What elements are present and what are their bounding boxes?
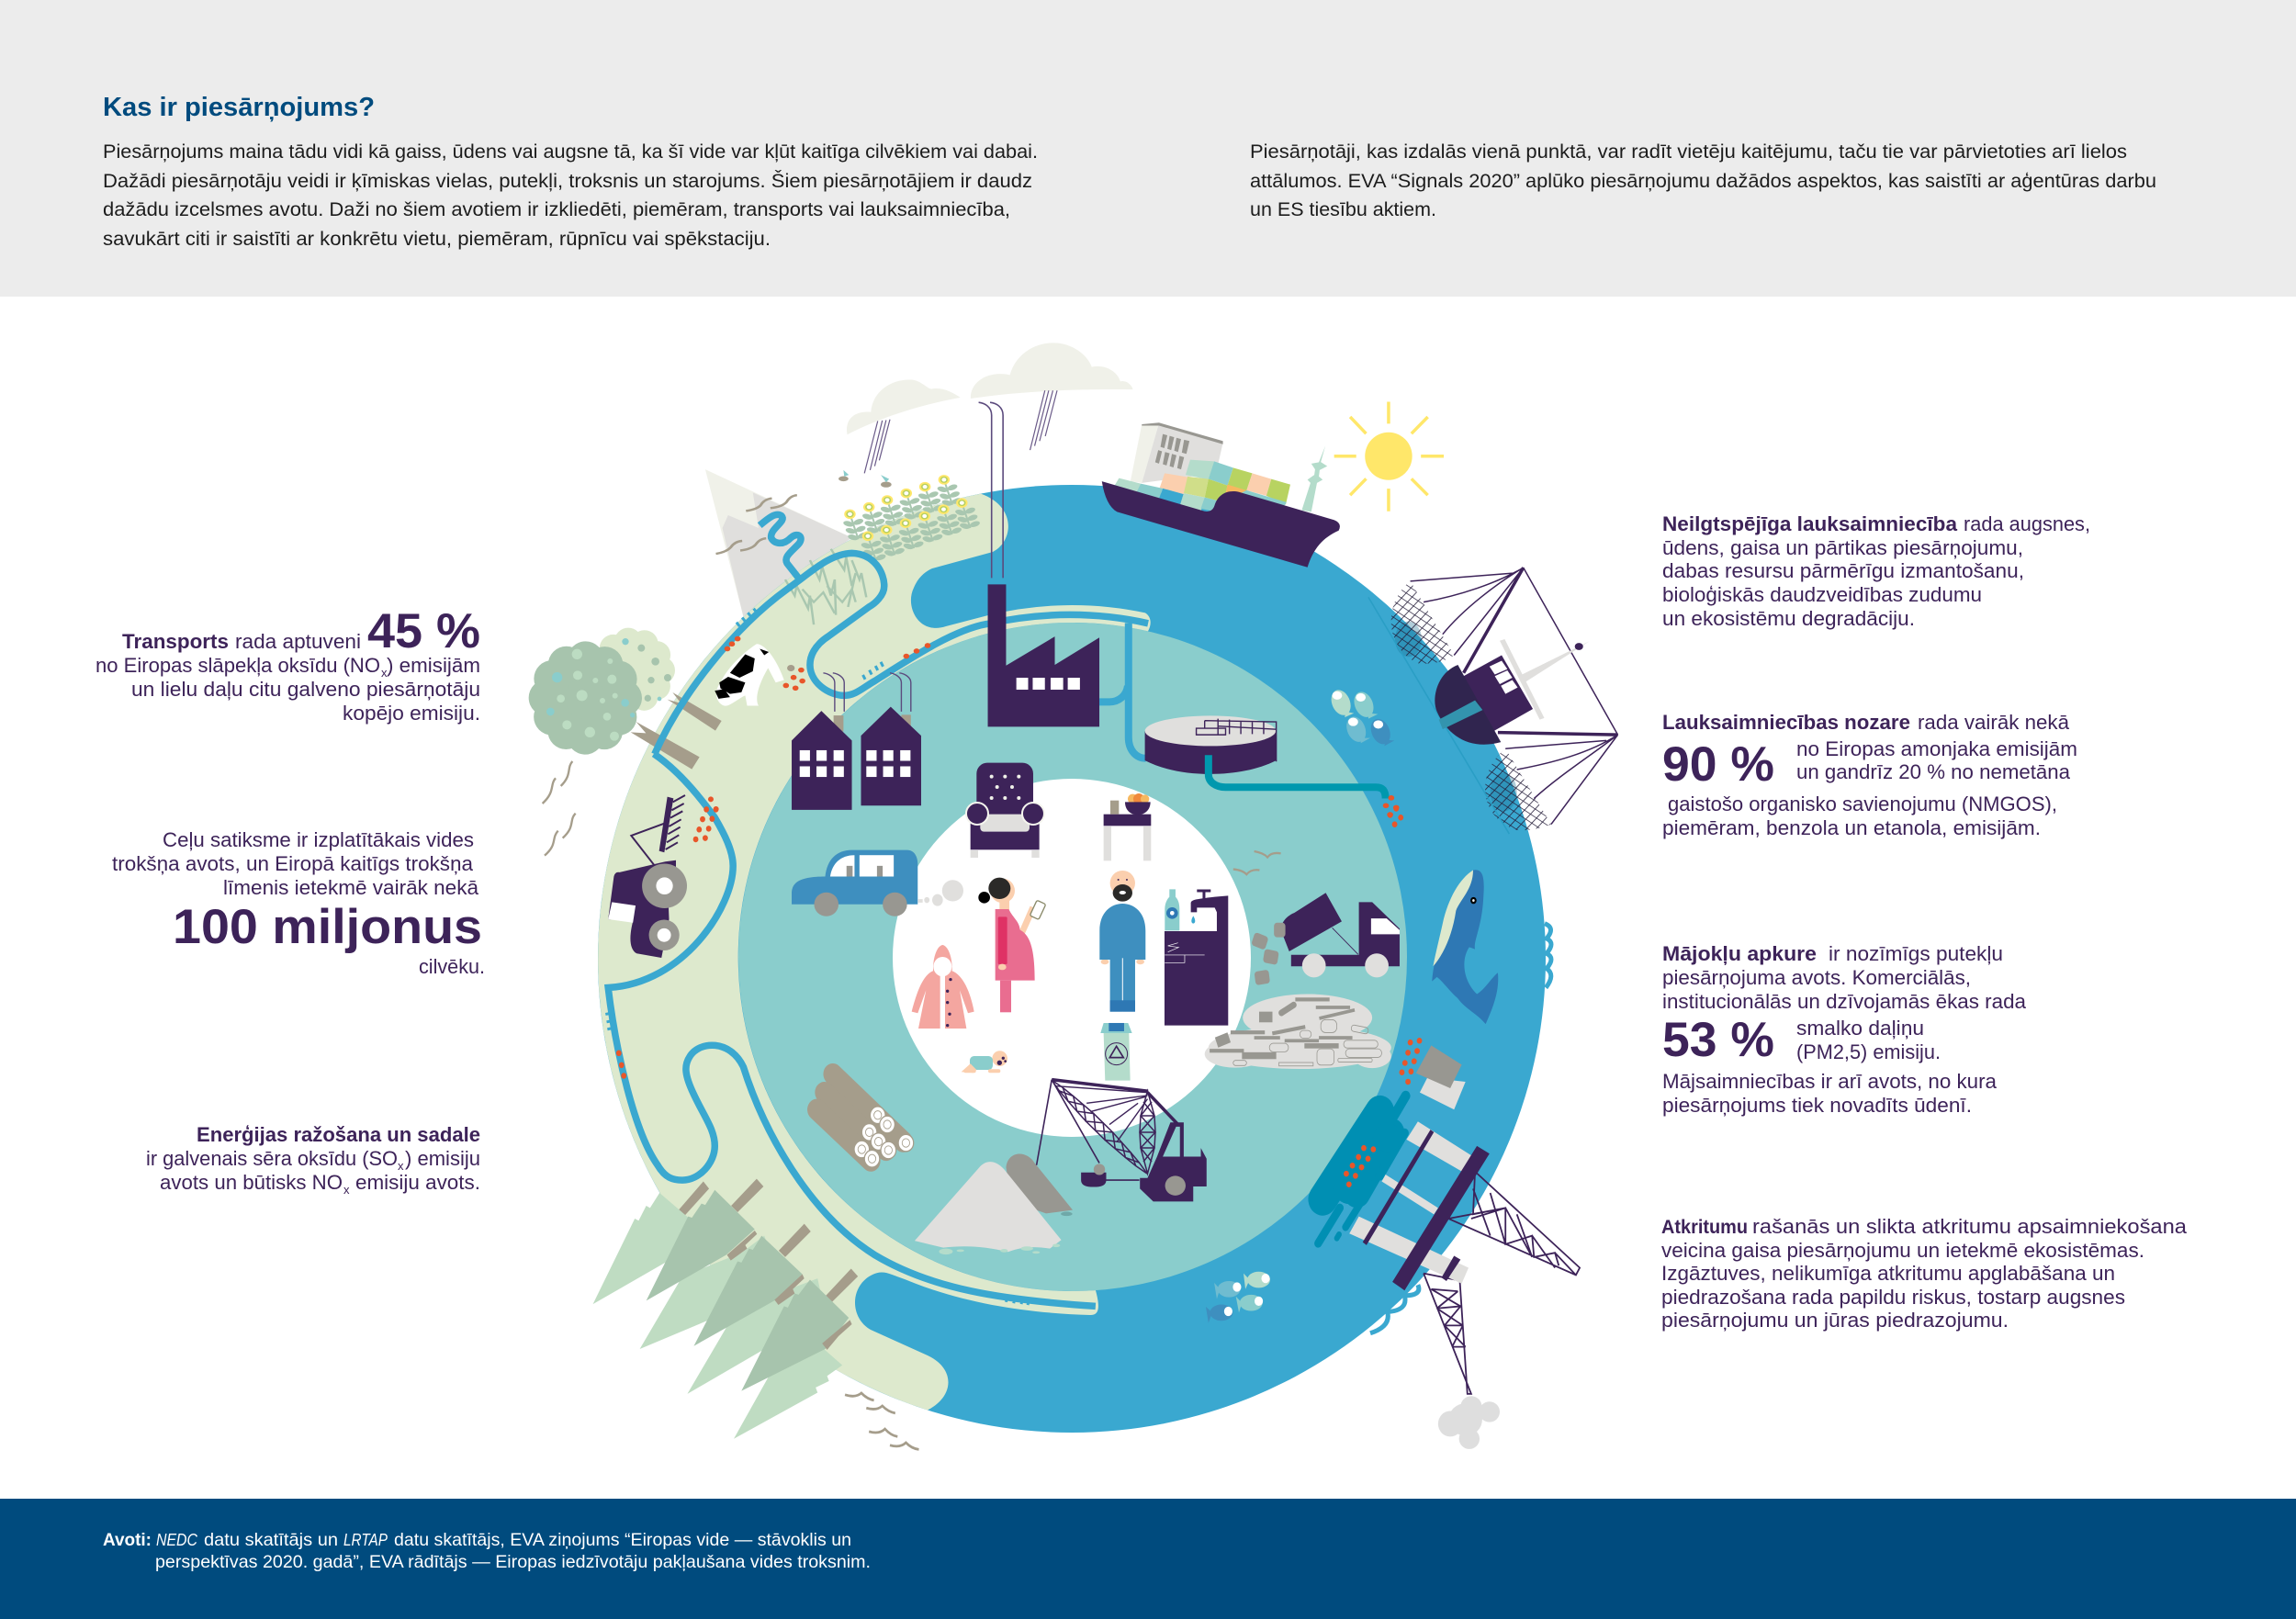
energy text block: Enerģijas ražošana un sadale bbox=[197, 1123, 480, 1146]
unsustainable agriculture text block: bioloģiskās daudzveidības zudumu bbox=[1662, 583, 1982, 606]
waste text block: piedrazošana rada papildu riskus, tostarp augsnes bbox=[1661, 1286, 2125, 1309]
waste text block: rašanās un slikta atkritumu apsaimniekošana bbox=[1752, 1215, 2188, 1238]
icon: container ship bbox=[1102, 422, 1340, 568]
ring: teal middle bbox=[738, 623, 1407, 1291]
icon: bees bbox=[838, 470, 892, 488]
icon: birds over teal ring bbox=[1233, 851, 1281, 874]
icon: dump truck with stones bbox=[1251, 893, 1400, 985]
waste text block: piesārņojumu un jūras piedrazojumu. bbox=[1661, 1309, 2009, 1332]
icon: oil spill bbox=[1318, 1096, 1406, 1243]
transport text block: no Eiropas slāpekļa oksīdu (NO bbox=[96, 654, 380, 677]
waste text block bbox=[1661, 1215, 2188, 1332]
household heating text block: (PM2,5) emisiju. bbox=[1796, 1040, 1941, 1063]
intro paragraph left: savukārt citi ir saistīti ar konkrētu vietu, piemēram, rūpnīcu vai spēkstaciju. bbox=[103, 228, 771, 250]
energy text block: emisiju avots. bbox=[355, 1171, 480, 1194]
icon: fish school lower bbox=[1206, 1272, 1270, 1323]
noise text block: trokšņa avots, un Eiropā kaitīgs trokšņa bbox=[112, 852, 474, 875]
agriculture sector text block: Lauksaimniecības nozare bbox=[1662, 711, 1910, 734]
transport text block: rada aptuveni bbox=[235, 630, 361, 653]
icon: dragline excavator bbox=[1037, 1080, 1207, 1201]
waste text block: Atkritumu bbox=[1661, 1217, 1748, 1238]
pipes from factory to treatment tank bbox=[1098, 623, 1145, 759]
energy text block: avots un būtisks NO bbox=[160, 1171, 343, 1194]
agriculture sector text block: un gandrīz 20 % no nemetāna bbox=[1796, 760, 2071, 783]
transport text block: Transports bbox=[122, 630, 229, 653]
intro paragraph right: attālumos. EVA “Signals 2020” aplūko piesārņojumu dažādos aspektos, kas saistīti ar aģentūras darbu bbox=[1250, 170, 2156, 192]
icon: side table with fruit bowl bbox=[1104, 793, 1151, 860]
household heating text block: ir nozīmīgs putekļu bbox=[1829, 942, 2003, 965]
ring: green land bbox=[598, 494, 1151, 1411]
icon: cow bbox=[715, 644, 805, 706]
icon: houses with chimneys bbox=[792, 673, 921, 810]
transport text block: ) emisijām bbox=[387, 654, 480, 677]
energy text block: ir galvenais sēra oksīdu (SO bbox=[146, 1147, 398, 1170]
mountain bbox=[705, 469, 852, 616]
household heating text block: 53 % bbox=[1662, 1013, 1774, 1067]
icon: sun bbox=[1334, 401, 1444, 512]
energy text block bbox=[146, 1123, 480, 1197]
household heating text block bbox=[1662, 942, 2027, 1117]
icon: wastewater treatment tank bbox=[1145, 715, 1277, 774]
household heating text block: smalko daļiņu bbox=[1796, 1017, 1924, 1040]
sources text bbox=[103, 1530, 871, 1572]
icon: plough and tractor bbox=[608, 795, 687, 958]
agriculture sector text block: no Eiropas amonjaka emisijām bbox=[1796, 737, 2077, 760]
icon: car with exhaust bbox=[792, 850, 963, 916]
ship mast bbox=[1301, 446, 1327, 512]
energy text block: x bbox=[398, 1159, 404, 1173]
icon: fish school upper bbox=[1328, 688, 1394, 746]
sources text: datu skatītājs un bbox=[204, 1530, 338, 1550]
intro paragraph left bbox=[103, 141, 1038, 250]
icon: child coat bbox=[912, 945, 974, 1029]
icon: armchair bbox=[966, 763, 1044, 858]
sources text: datu skatītājs, EVA ziņojums “Eiropas vide — stāvoklis un bbox=[394, 1530, 851, 1550]
sources text: perspektīvas 2020. gadā”, EVA rādītājs — Eiropas iedzīvotāju pakļaušana vides troksnim. bbox=[155, 1552, 871, 1572]
agriculture sector text block: rada vairāk nekā bbox=[1918, 711, 2070, 734]
net top bbox=[1391, 581, 1454, 664]
noise text block: līmenis ietekmē vairāk nekā bbox=[223, 876, 479, 899]
unsustainable agriculture text block: un ekosistēmu degradāciju. bbox=[1662, 607, 1915, 630]
noise text block bbox=[112, 828, 485, 978]
ring: outer water bbox=[598, 485, 1546, 1433]
agriculture sector text block: gaistošo organisko savienojumu (NMGOS), bbox=[1668, 793, 2057, 815]
energy text block: ) emisiju bbox=[405, 1147, 480, 1170]
icon: sand piles bbox=[915, 1153, 1073, 1254]
intro paragraph right bbox=[1250, 141, 2156, 220]
icon: birds left of land bbox=[543, 761, 576, 856]
unsustainable agriculture text block: ūdens, gaisa un pārtikas piesārņojumu, bbox=[1662, 536, 2023, 559]
noise text block: 100 miljonus bbox=[173, 900, 482, 954]
net bottom bbox=[1485, 748, 1551, 830]
crane mast lattice bbox=[1140, 1091, 1155, 1174]
icon: bearded man bbox=[1099, 871, 1145, 1012]
unsustainable agriculture text block: Neilgtspējīga lauksaimniecība bbox=[1662, 512, 1958, 535]
intro paragraph right: Piesārņotāji, kas izdalās vienā punktā, var radīt vietēju kaitējumu, taču tie var pārvietoties arī lielos bbox=[1250, 141, 2127, 163]
rivers and roads on land bbox=[605, 514, 1148, 1306]
household heating text block: piesārņojuma avots. Komerciālās, bbox=[1662, 966, 1971, 989]
agriculture sector text block bbox=[1662, 711, 2077, 839]
unsustainable agriculture text block: rada augsnes, bbox=[1964, 512, 2090, 535]
energy text block: x bbox=[343, 1183, 350, 1197]
transport text block: 45 % bbox=[367, 604, 480, 658]
circular diagram: water, land, inner rings bbox=[598, 485, 1546, 1433]
unsustainable agriculture text block: dabas resursu pārmērīgu izmantošanu, bbox=[1662, 559, 2024, 582]
icon: trees bbox=[546, 638, 722, 770]
transport text block: kopējo emisiju. bbox=[343, 702, 480, 725]
outlet pipe to water bbox=[1209, 755, 1386, 799]
icon: kitchen sink with tap and bottle bbox=[1165, 889, 1228, 1026]
noise text block: Ceļu satiksme ir izplatītākais vides bbox=[163, 828, 474, 851]
icon: fishing boat with nets bbox=[1368, 568, 1618, 834]
icon: logs bbox=[816, 1074, 914, 1167]
household heating text block: Mājokļu apkure bbox=[1662, 942, 1817, 965]
header band bbox=[0, 0, 2296, 297]
water edge waves bbox=[1370, 924, 1551, 1333]
icon: oil rig towers and deck bbox=[1349, 1121, 1580, 1449]
noise text block: cilvēku. bbox=[419, 955, 485, 978]
household heating text block: Mājsaimniecības ir arī avots, no kura bbox=[1662, 1070, 1998, 1093]
icon: baby bbox=[962, 1051, 1007, 1073]
icon: pregnant woman with phone bbox=[978, 878, 1046, 1012]
sources text: NEDC bbox=[156, 1531, 198, 1549]
sources text: Avoti: bbox=[103, 1530, 152, 1550]
icon: whale bbox=[1432, 870, 1498, 1024]
intro paragraph left: dažādu izcelsmes avotu. Daži no šiem avotiem ir izkliedēti, piemēram, transports vai lauksaimniecība, bbox=[103, 198, 1010, 220]
intro paragraph left: Piesārņojums maina tādu vidi kā gaiss, ūdens vai augsne tā, ka šī vide var kļūt kaitīga cilvēkiem vai dabai. bbox=[103, 141, 1038, 163]
household heating text block: institucionālās un dzīvojamās ēkas rada bbox=[1662, 990, 2027, 1013]
crane boom lattice bbox=[1052, 1080, 1147, 1174]
left column text bbox=[96, 604, 485, 1197]
agriculture sector text block: 90 % bbox=[1662, 737, 1774, 792]
waste text block: veicina gaisa piesārņojumu un ietekmē ekosistēmas. bbox=[1661, 1239, 2144, 1262]
circle: white centre bbox=[893, 779, 1251, 1137]
household heating text block: piesārņojums tiek novadīts ūdenī. bbox=[1662, 1094, 1972, 1117]
waste text block: Izgāztuves, nelikumīga atkritumu apglabāšana un bbox=[1661, 1262, 2115, 1285]
heading: what is pollution: Kas ir piesārņojums? bbox=[103, 93, 375, 122]
icon: smoke cloud below rig bbox=[1438, 1396, 1500, 1449]
orange pollution dots bbox=[782, 668, 805, 691]
orange pollution dots on roads bbox=[616, 636, 930, 1079]
icon: flower crop bbox=[842, 475, 981, 563]
icon: floating platform debris bbox=[1400, 1038, 1466, 1109]
transport text block: un lielu daļu citu galveno piesārņotāju bbox=[131, 678, 480, 701]
icon: birds near mountain bbox=[716, 495, 797, 554]
intro paragraph left: Dažādi piesārņotāju veidi ir ķīmiskas vielas, putekļi, troksnis un starojums. Šiem piesārņotājiem ir daudz bbox=[103, 169, 1032, 192]
icon: reeds bbox=[785, 549, 866, 624]
footer band bbox=[0, 1499, 2296, 1619]
transport text block bbox=[96, 604, 480, 725]
icon: pine forest bbox=[593, 1179, 858, 1439]
road bumps bbox=[737, 609, 884, 680]
sources text: LRTAP bbox=[343, 1531, 388, 1549]
icon: waste pile bbox=[1205, 995, 1391, 1069]
intro paragraph right: un ES tiesību aktiem. bbox=[1250, 198, 1436, 220]
icon: factory with chimney bbox=[979, 402, 1099, 726]
unsustainable agriculture text block bbox=[1662, 512, 2090, 630]
icon: birds bottom bbox=[845, 1393, 919, 1449]
agriculture sector text block: piemēram, benzola un etanola, emisijām. bbox=[1662, 816, 2041, 839]
icon: recycling bin bbox=[1100, 1023, 1132, 1081]
icon: polluted dots from outlet bbox=[1383, 795, 1403, 827]
transport text block: x bbox=[381, 666, 388, 680]
icon: clouds with rain bbox=[847, 343, 1133, 473]
right column text bbox=[1661, 512, 2188, 1332]
